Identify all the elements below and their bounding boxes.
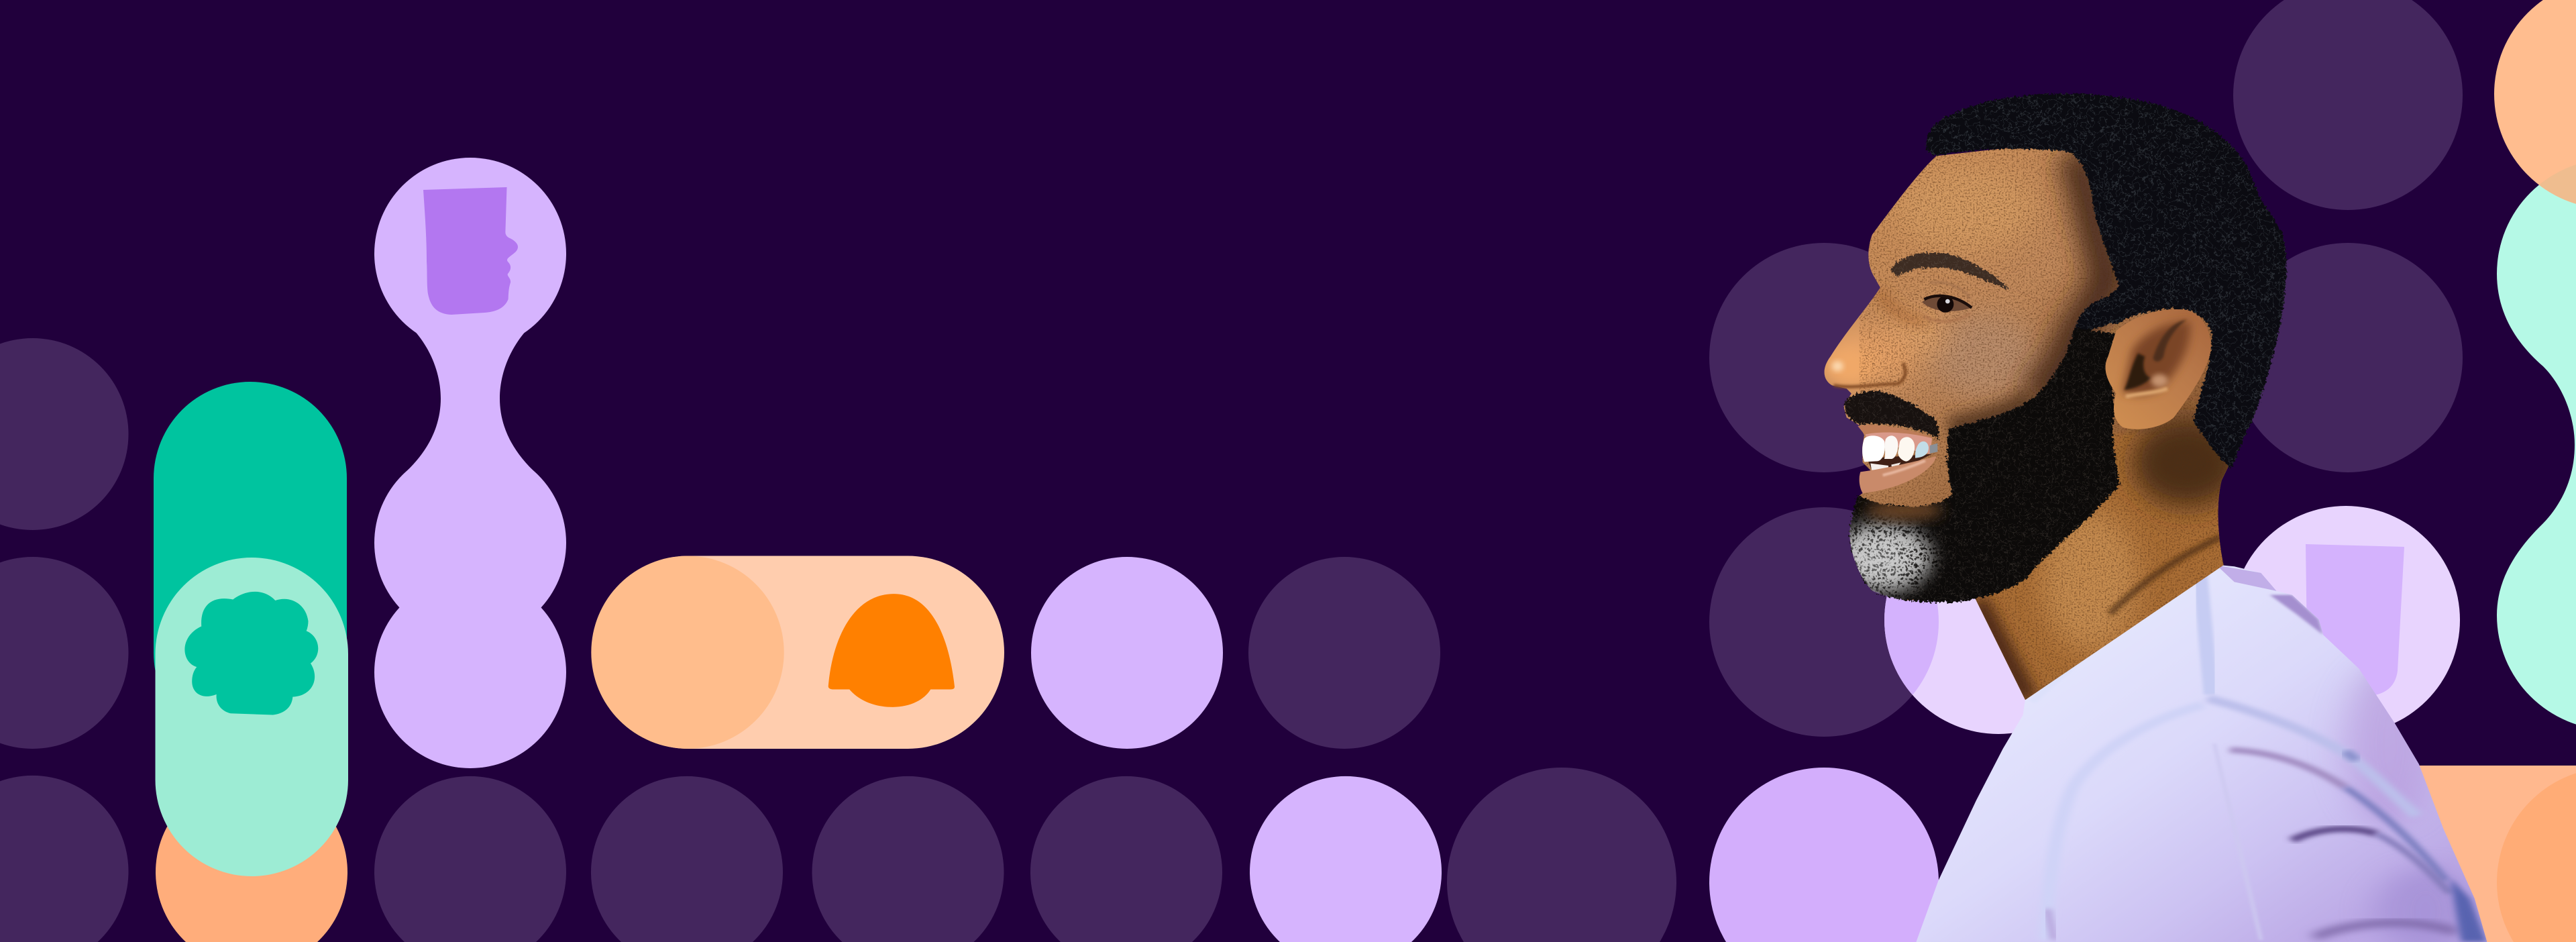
temple shading [2033,153,2110,399]
grey chin [1835,502,1943,590]
portrait: man smiling in profile [1825,93,2487,942]
ear [2106,309,2211,429]
seams [2200,570,2211,694]
moustache [1845,391,1939,440]
eye [1922,282,1972,321]
sleeve folds [2214,743,2261,940]
dim circle grid, left and centre [0,338,1676,942]
shirt [1916,565,2487,942]
icon: face profile [423,187,518,315]
head and neck [1811,94,2292,706]
lilac accent circles [1031,557,1939,942]
mouth [1858,425,1937,493]
panel: green and mint pill with hair icon [154,382,348,942]
dim circles behind portrait [1709,0,2463,737]
neck shading [1972,433,2238,700]
nose underside [1833,363,1905,386]
lower lip [1860,456,1937,493]
collar back [2216,565,2277,591]
panel: lavender circles behind neck and shoulder [1884,506,2460,734]
icon: curly hair [184,592,318,715]
panel: peach pill with bell icon [591,556,1004,749]
panel: lilac merging blob with face icon [374,158,566,768]
teeth [1862,435,1885,462]
upper lip [1858,425,1932,443]
hair [1926,94,2286,469]
icon: bell shape [828,594,955,707]
eyebrow [1892,253,2010,290]
beard [1849,327,2119,603]
icon: face profile partly hidden [2306,544,2404,695]
panel: orange block at bottom right [2147,766,2576,942]
panel: mint wave and peach circle on right edge [2494,0,2576,730]
